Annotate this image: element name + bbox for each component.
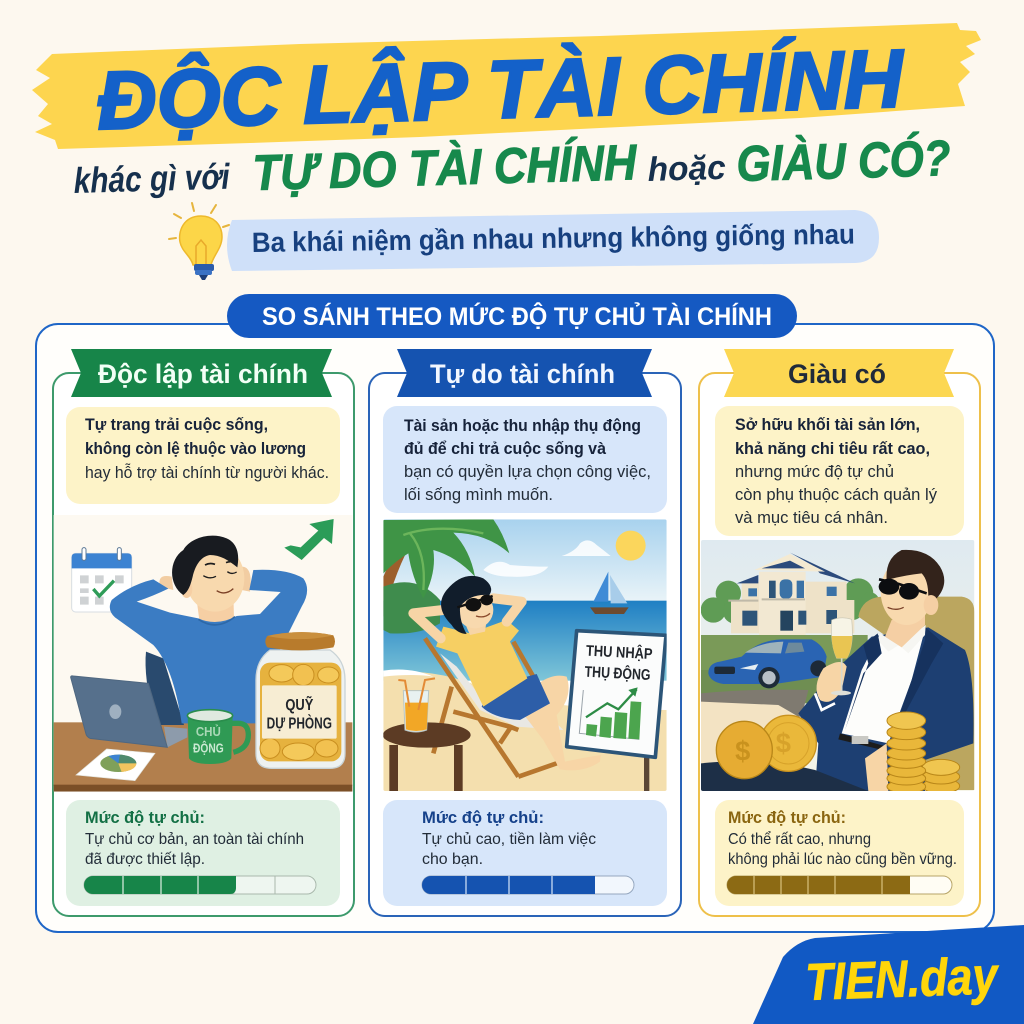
jar: quỹ dự phòng [256, 632, 345, 768]
sun [616, 531, 646, 561]
champagne glass [831, 618, 852, 695]
subtitle [73, 130, 951, 201]
ribbon text: Tự do tài chính [430, 359, 615, 389]
description box: khả năng chi tiêu rất cao, [735, 440, 930, 458]
description box: hay hỗ trợ tài chính từ người khác. [85, 463, 329, 482]
ribbon heading [397, 349, 652, 397]
description box [66, 407, 340, 504]
level box [383, 800, 667, 906]
jar: quỹ dự phòng: DỰ PHÒNG [267, 714, 332, 732]
illustration: beach lounger [383, 519, 667, 793]
description box: Tự trang trải cuộc sống, [85, 416, 268, 434]
gold coins: $ [776, 728, 791, 759]
clouds [483, 540, 611, 577]
sign: thu nhập thụ động: THỤ ĐỘNG [584, 663, 651, 684]
sign: thu nhập thụ động [567, 631, 666, 793]
level box: Có thể rất cao, nhưng [728, 830, 871, 848]
sign: thu nhập thụ động: THU NHẬP [586, 642, 653, 663]
description box: Sở hữu khối tài sản lớn, [735, 416, 920, 434]
subtitle connector: hoặc [647, 149, 726, 189]
description box [715, 406, 964, 536]
level box [715, 800, 964, 906]
description box: lối sống mình muốn. [404, 486, 553, 504]
laptop [71, 676, 187, 747]
progress bar [422, 876, 634, 894]
illustration: relaxed man at desk [52, 515, 353, 792]
man on lounger [413, 576, 601, 770]
car [708, 639, 827, 688]
ribbon heading [71, 349, 332, 397]
level box: Tự chủ cao, tiền làm việc [422, 831, 596, 848]
logo text: TIEN.day [804, 947, 1001, 1012]
lounge chair [425, 638, 563, 777]
level box [66, 800, 340, 906]
description box: nhưng mức độ tự chủ [735, 463, 894, 481]
villa [728, 553, 855, 635]
panel: độc lập tài chính [52, 349, 354, 916]
description box [383, 406, 667, 513]
mug: chủ động: CHỦ [196, 724, 221, 739]
gold coins [716, 715, 816, 779]
level box: Tự chủ cơ bản, an toàn tài chính [85, 831, 304, 848]
chair [146, 652, 184, 725]
trees [701, 578, 879, 624]
mug: chủ động: ĐỘNG [193, 740, 224, 755]
side table with drink [383, 678, 471, 792]
logo: TIEN.day [753, 925, 1024, 1024]
level box: Mức độ tự chủ: [422, 808, 544, 827]
level box: không phải lúc nào cũng bền vững. [728, 851, 957, 868]
tagline text: Ba khái niệm gần nhau nhưng không giống nhau [252, 219, 855, 258]
description box: và mục tiêu cá nhân. [735, 509, 888, 527]
illustration: wealthy man with villa [701, 540, 974, 793]
icon: calendar [72, 548, 132, 612]
title banner [32, 23, 981, 149]
panel: tự do tài chính [369, 349, 681, 916]
ribbon text: Giàu có [788, 359, 886, 389]
mug: chủ động [187, 710, 248, 764]
level box: Mức độ tự chủ: [728, 808, 846, 827]
sailboat [590, 572, 629, 614]
main title: ĐỘC LẬP TÀI CHÍNH [96, 33, 906, 147]
coin stacks [887, 712, 960, 793]
section heading text: SO SÁNH THEO MỨC ĐỘ TỰ CHỦ TÀI CHÍNH [262, 301, 772, 331]
man [110, 536, 307, 723]
man in suit [798, 550, 974, 791]
section heading pill [227, 294, 797, 338]
icon: light bulb [169, 203, 229, 280]
description box: không còn lệ thuộc vào lương [85, 440, 306, 458]
jar: quỹ dự phòng: QUỸ [285, 696, 313, 714]
subtitle green term 2: GIÀU CÓ? [736, 130, 951, 192]
ribbon text: Độc lập tài chính [98, 359, 308, 389]
progress bar [84, 876, 316, 894]
tagline pill [227, 210, 879, 271]
gold coins: $ [735, 736, 750, 767]
subtitle lead text: khác gì với [73, 156, 231, 201]
ribbon heading [724, 349, 954, 397]
level box: cho bạn. [422, 851, 483, 868]
dark table [701, 761, 868, 791]
description box: Tài sản hoặc thu nhập thụ động [404, 417, 641, 435]
palm tree [383, 519, 509, 634]
subtitle green term 1: TỰ DO TÀI CHÍNH [252, 134, 638, 201]
level box: đã được thiết lập. [85, 851, 205, 868]
description box: đủ để chi trả cuộc sống và [404, 440, 607, 458]
armchair [858, 597, 974, 790]
description box: còn phụ thuộc cách quản lý [735, 486, 938, 504]
description box: bạn có quyền lựa chọn công việc, [404, 463, 651, 481]
panel: giàu có [699, 349, 980, 916]
progress bar [727, 876, 952, 894]
desk [52, 722, 353, 792]
level box: Mức độ tự chủ: [85, 808, 205, 827]
paper chart [76, 749, 155, 781]
comparison frame [36, 294, 994, 932]
yellow brush stroke [32, 23, 981, 149]
icon: growth arrow [284, 519, 334, 560]
